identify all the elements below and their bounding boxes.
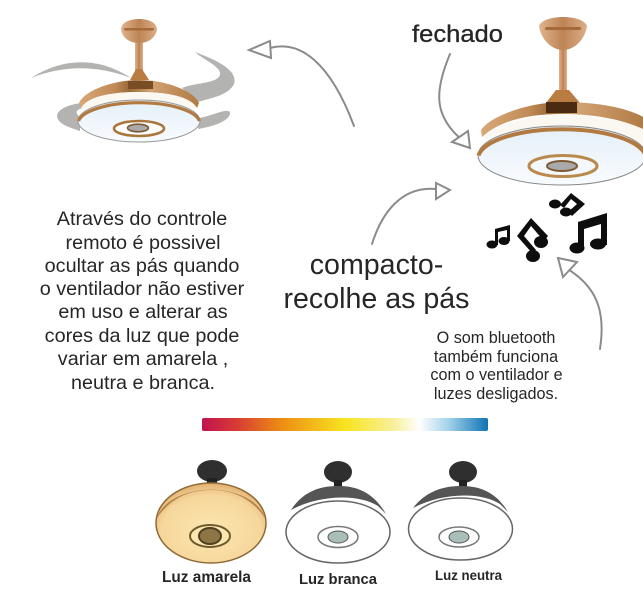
text: bluetooth: também funciona bbox=[434, 348, 558, 366]
text: description of remote control: cores da luz que pode bbox=[45, 325, 239, 347]
canopy and rod bbox=[539, 17, 587, 103]
heading: compacto: recolhe as pás bbox=[284, 283, 469, 315]
arrow: fechado to fan bbox=[439, 54, 470, 148]
text: description of remote control: variar em amarela , bbox=[58, 348, 228, 370]
text: bluetooth: luzes desligados. bbox=[434, 385, 558, 403]
label: luz neutra: Luz neutra bbox=[435, 567, 502, 583]
fan with blades open bbox=[31, 19, 235, 142]
text: description of remote control: em uso e alterar as bbox=[58, 301, 228, 323]
label: fechado: fechado bbox=[412, 21, 503, 48]
arrow: to music notes bbox=[558, 258, 602, 349]
heading: compacto: compacto- bbox=[310, 249, 443, 281]
label: luz branca: Luz branca bbox=[299, 571, 378, 588]
fan blades bbox=[31, 52, 235, 131]
note large right bbox=[570, 213, 607, 254]
fan: luz amarela bbox=[156, 460, 266, 563]
text: description of remote control: remoto é possivel bbox=[65, 232, 221, 254]
text: description of remote control: ocultar as pás quando bbox=[45, 255, 239, 277]
fan body bbox=[78, 80, 200, 142]
fan body bbox=[478, 102, 643, 185]
text: bluetooth: O som bluetooth bbox=[437, 329, 555, 347]
label: luz amarela: Luz amarela bbox=[162, 569, 251, 586]
icons: music notes bbox=[486, 193, 607, 262]
text: description of remote control: o ventilador não estiver bbox=[40, 278, 245, 300]
color spectrum bar bbox=[202, 418, 488, 431]
text: description of remote control: neutra e branca. bbox=[71, 372, 215, 394]
note middle bbox=[517, 218, 548, 262]
fan: luz neutra bbox=[408, 461, 512, 560]
arrow: to open fan bbox=[249, 41, 354, 126]
note small left bbox=[486, 225, 510, 248]
arrow: to compact fan bbox=[372, 183, 450, 244]
text: bluetooth: com o ventilador e bbox=[430, 366, 563, 384]
note top bbox=[549, 193, 585, 216]
fan: luz branca bbox=[286, 461, 390, 563]
canopy and rod bbox=[121, 19, 157, 80]
text: description of remote control: Através do controle bbox=[57, 208, 227, 230]
fan closed bbox=[478, 17, 643, 185]
